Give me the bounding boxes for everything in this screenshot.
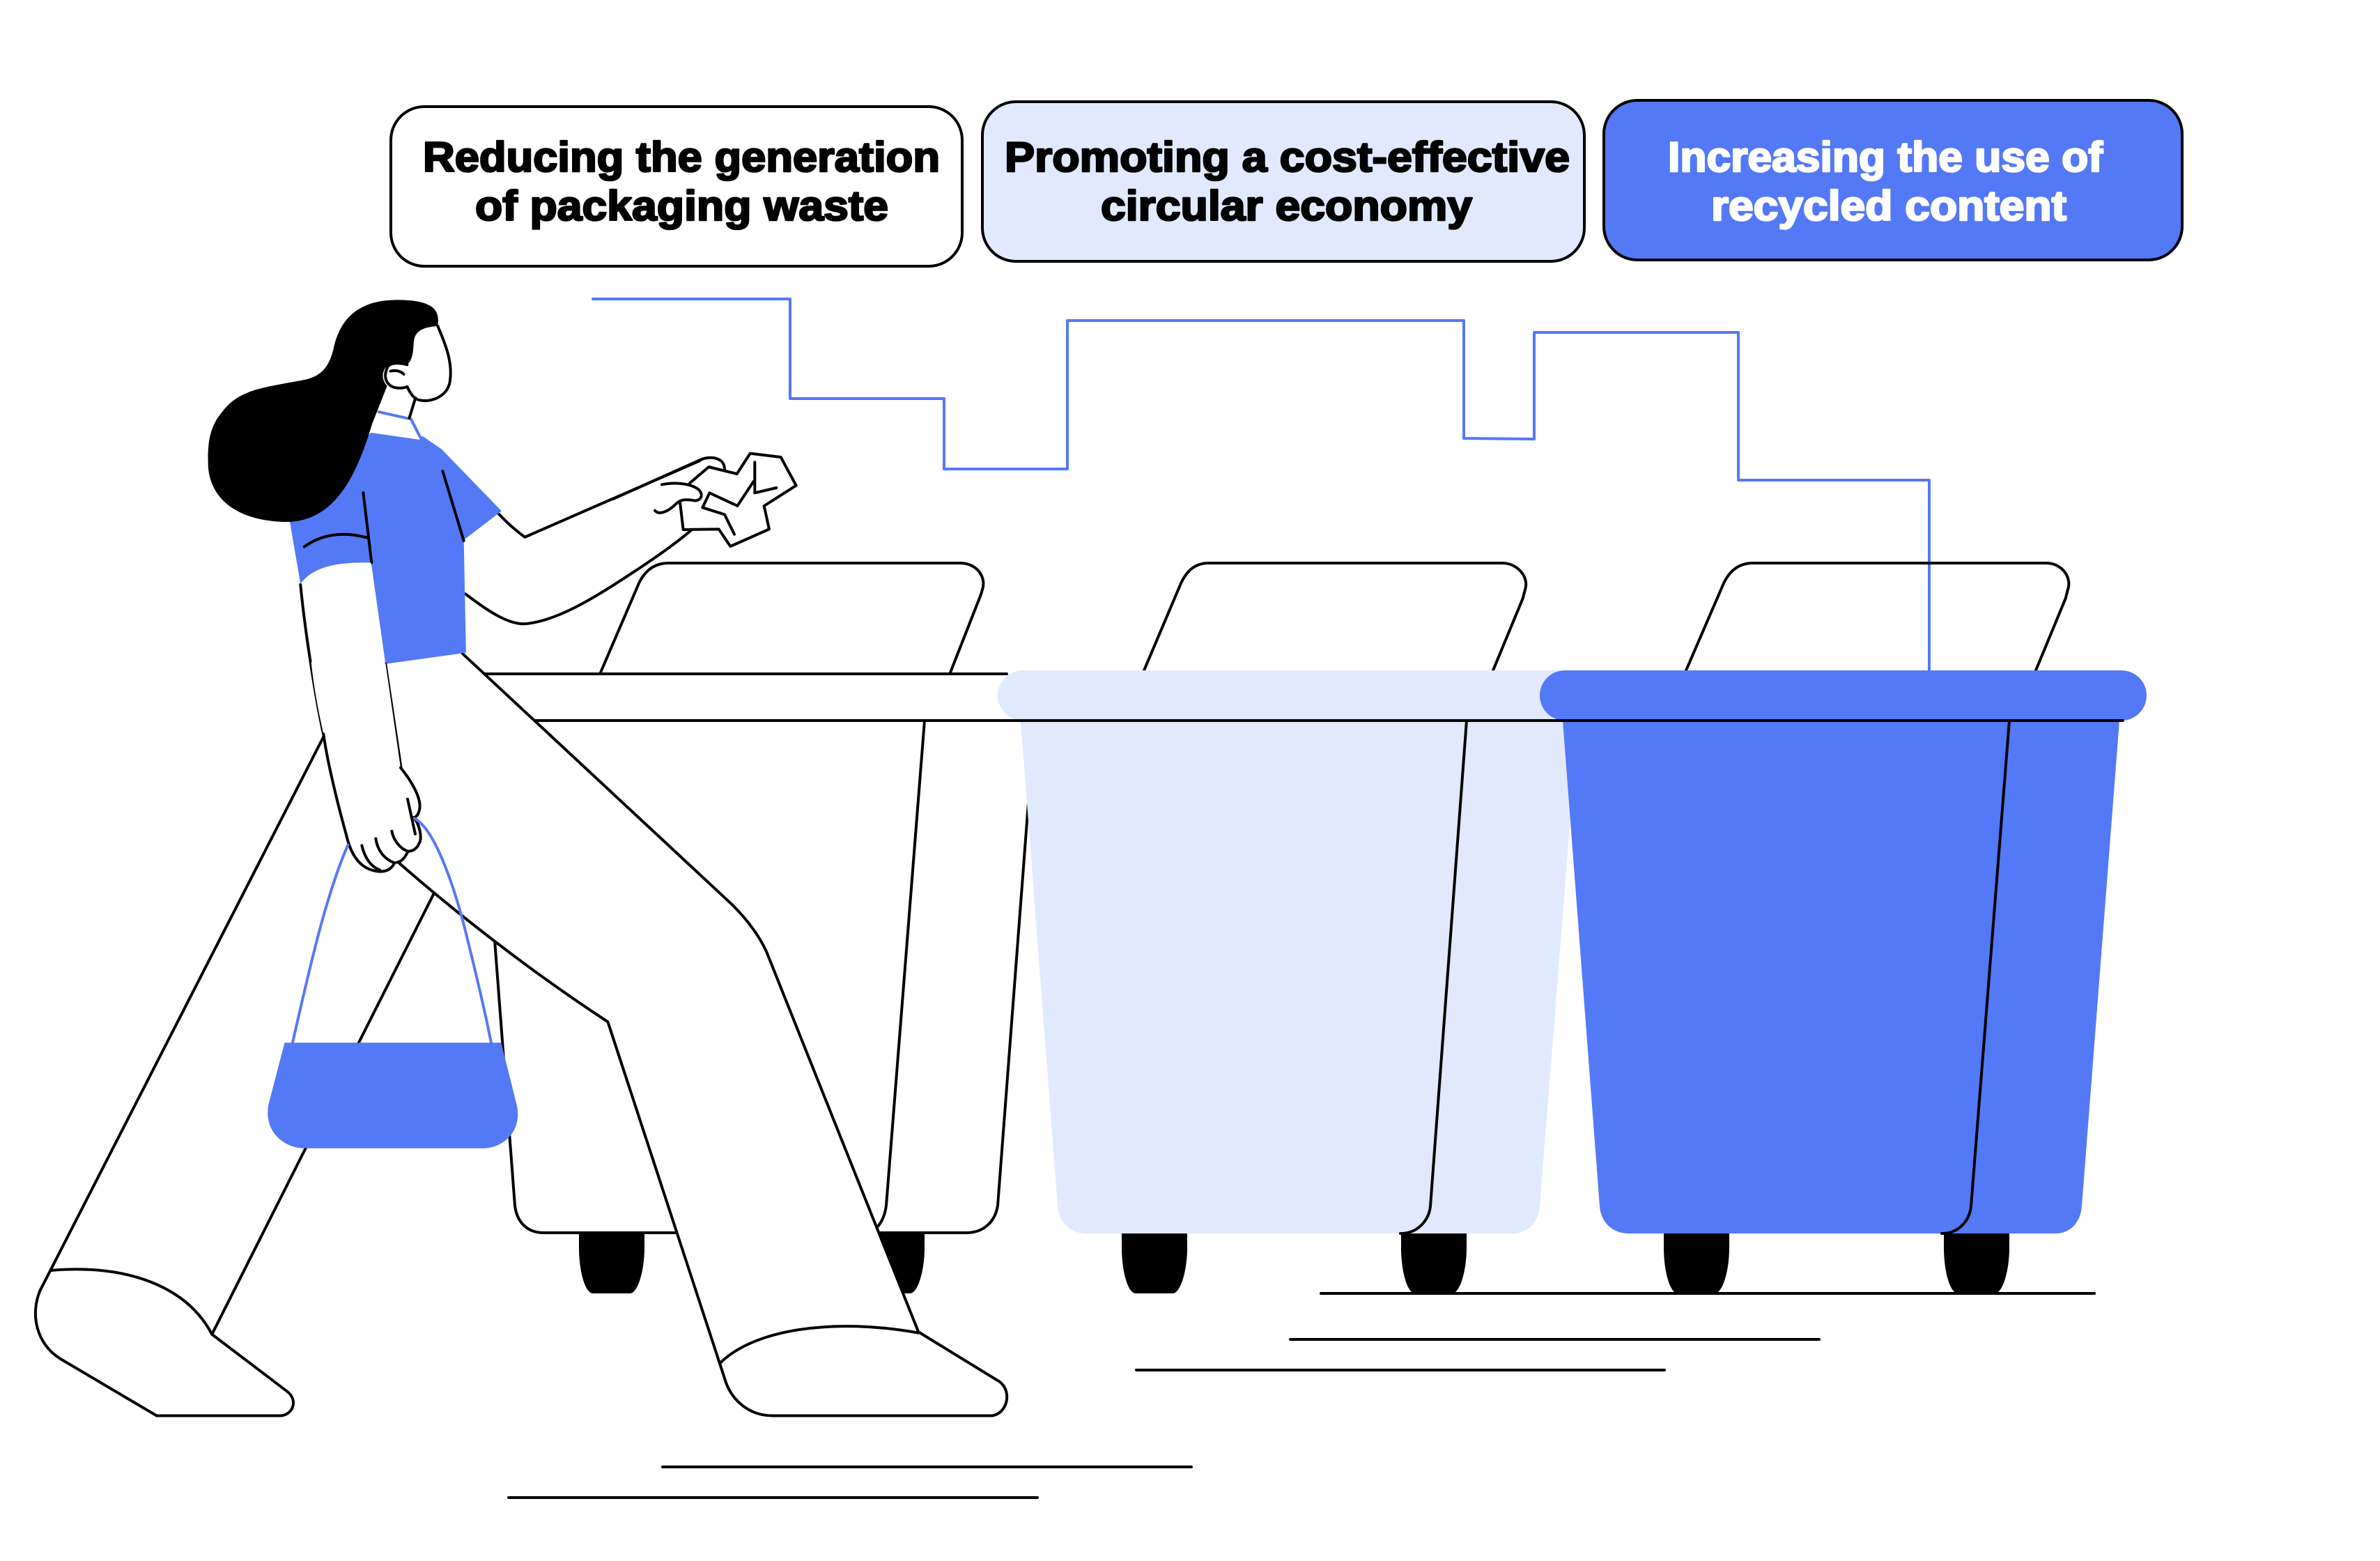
goal box: reducing packaging waste: Reducing the generation — [423, 134, 940, 180]
shirt — [289, 412, 502, 664]
bin 3: blue — [1540, 563, 2147, 1293]
raised arm — [465, 461, 722, 624]
goal box: recycled content — [1604, 100, 2182, 260]
goal box: recycled content: recycled content — [1711, 183, 2066, 229]
connector line — [593, 299, 1929, 670]
bin 2: light blue — [998, 563, 1605, 1293]
goal box: circular economy: circular economy — [1101, 183, 1473, 229]
crumpled paper — [613, 454, 796, 546]
head and hair — [208, 300, 451, 522]
handbag — [268, 818, 518, 1148]
bin 1: white — [453, 563, 1035, 1293]
goal box: circular economy — [982, 102, 1584, 261]
goal box: reducing packaging waste: of packaging waste — [475, 183, 888, 229]
figure: woman throwing paper — [36, 300, 1007, 1416]
back leg — [36, 736, 434, 1416]
bin rim baseline — [488, 719, 2123, 722]
goal box: recycled content: Increasing the use of — [1668, 134, 2103, 180]
ground lines — [509, 1293, 2094, 1498]
goal box: reducing packaging waste — [391, 107, 962, 266]
hanging arm and hand — [300, 562, 421, 872]
front leg — [324, 654, 1007, 1416]
goal box: circular economy: Promoting a cost-effective — [1005, 134, 1570, 180]
